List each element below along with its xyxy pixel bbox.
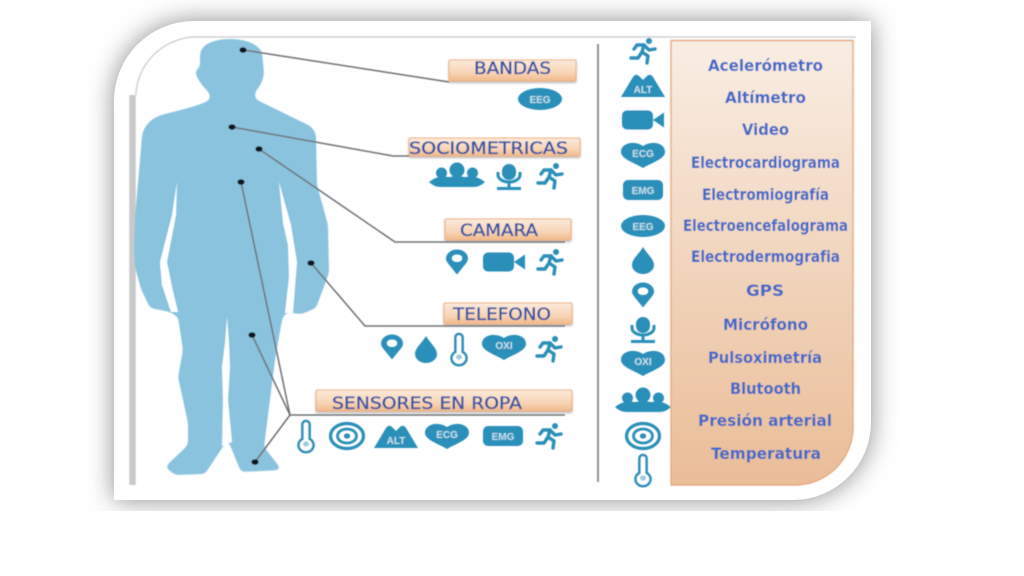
icon: EEG: EEG bbox=[529, 95, 551, 106]
sensor list: Blutooth bbox=[730, 379, 801, 398]
icon column: EEG bbox=[632, 222, 654, 233]
sensor list bbox=[683, 56, 848, 463]
connector lines bbox=[232, 50, 565, 462]
sensor list: Electrodermografia bbox=[691, 247, 840, 266]
label: BANDAS: BANDAS bbox=[474, 59, 551, 79]
icons: sensores en ropa: EMG bbox=[492, 432, 515, 443]
label: TELEFONO bbox=[444, 303, 572, 325]
icons: telefono: OXI bbox=[495, 341, 513, 352]
sensor list: Acelerómetro bbox=[708, 56, 823, 75]
sensor list: Pulsoximetría bbox=[708, 348, 822, 367]
body silhouette bbox=[134, 39, 329, 475]
frame shadow bbox=[114, 21, 871, 500]
sensor list: Altímetro bbox=[725, 88, 806, 107]
label: TELEFONO: TELEFONO bbox=[452, 305, 551, 325]
icons: sensores en ropa: ALT bbox=[387, 436, 405, 447]
sensor list: Electrocardiograma bbox=[691, 153, 840, 172]
label: CAMARA bbox=[445, 219, 571, 241]
sensor list: GPS bbox=[746, 281, 784, 300]
label: SOCIOMETRICAS: SOCIOMETRICAS bbox=[409, 139, 568, 159]
sensor list: Electromiografía bbox=[702, 185, 829, 204]
icon column: ALT bbox=[634, 85, 652, 96]
label: BANDAS bbox=[449, 59, 576, 81]
label: SENSORES EN ROPA bbox=[316, 390, 572, 414]
icons: camara bbox=[446, 249, 562, 274]
sensor list: Presión arterial bbox=[698, 411, 832, 430]
icon column bbox=[615, 38, 671, 486]
icons: sociometricas bbox=[429, 162, 562, 188]
label: SENSORES EN ROPA: SENSORES EN ROPA bbox=[332, 394, 522, 414]
icons: sensores en ropa bbox=[298, 421, 561, 452]
icon column: EMG bbox=[632, 186, 655, 197]
icon column: OXI bbox=[634, 357, 652, 368]
sensor location dots bbox=[228, 47, 315, 465]
panel: sensor names bbox=[671, 40, 853, 485]
icon: EEG bbox=[518, 88, 562, 110]
sensor list: Micrófono bbox=[723, 315, 808, 334]
icons: sensores en ropa: ECG bbox=[436, 430, 458, 441]
icon column: ECG bbox=[632, 149, 654, 160]
sensor list: Video bbox=[742, 120, 789, 139]
icons: telefono bbox=[381, 334, 561, 365]
sensor list: Temperatura bbox=[711, 444, 821, 463]
frame inner edge bbox=[132, 37, 856, 485]
label: CAMARA: CAMARA bbox=[460, 221, 538, 241]
sensor list: Electroencefalograma bbox=[683, 216, 848, 235]
white picture frame bbox=[114, 21, 871, 500]
divider bbox=[597, 44, 599, 482]
